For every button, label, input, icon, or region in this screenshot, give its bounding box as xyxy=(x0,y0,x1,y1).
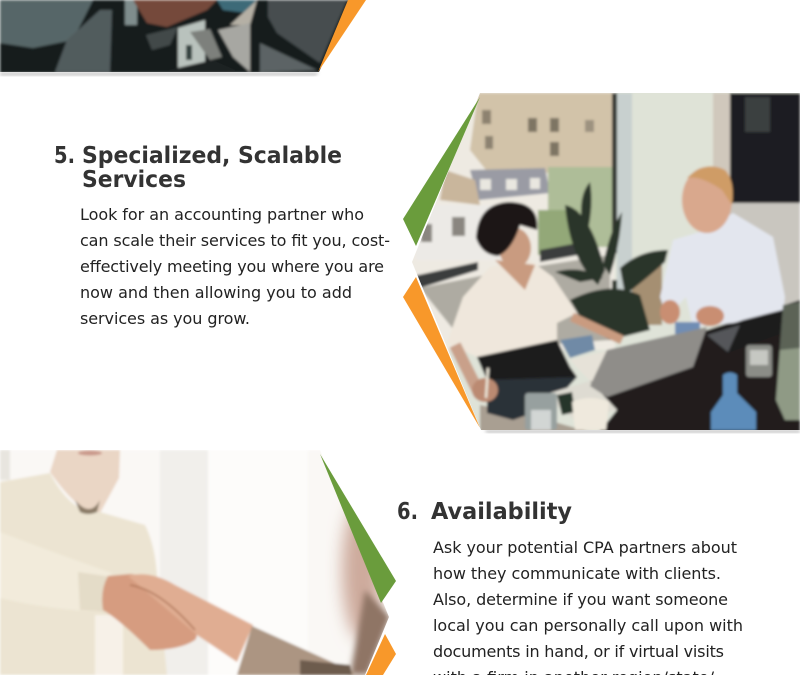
green accent xyxy=(320,454,396,603)
chair, papers and laptop xyxy=(560,335,595,358)
green accent xyxy=(403,97,480,246)
text block: item 6 body: documents in hand, or if virtual visits xyxy=(433,642,724,661)
panel: item 6 text xyxy=(397,499,743,675)
handshake xyxy=(102,574,197,650)
heading: item 5: Services xyxy=(82,167,186,193)
text block: item 6 body: local you can personally call upon with xyxy=(433,616,743,635)
text block: item 5 body: Look for an accounting partner who xyxy=(80,205,364,224)
text block: item 6 body: how they communicate with clients. xyxy=(433,564,721,583)
heading: item 5 xyxy=(54,143,342,193)
heading: item 6: 6. xyxy=(397,499,418,525)
neck shadow and face xyxy=(75,500,100,514)
panel: handshake photo xyxy=(0,450,400,675)
panel: item 5 text xyxy=(54,143,390,328)
panel: office meeting photo xyxy=(400,90,800,435)
text block: item 5 body: can scale their services to fit you, cost- xyxy=(80,231,390,250)
woman xyxy=(447,202,622,420)
text block: item 6 body: Ask your potential CPA partners about xyxy=(433,538,737,557)
man in sweater xyxy=(50,450,120,513)
orange accent xyxy=(318,0,366,72)
second sleeve xyxy=(237,626,354,675)
man xyxy=(660,166,785,334)
orange accent xyxy=(403,277,480,428)
heading: item 6: Availability xyxy=(431,499,572,525)
text block: item 5 body: services as you grow. xyxy=(80,309,250,328)
text block: item 6 body xyxy=(433,538,743,675)
window frame and wall xyxy=(612,93,617,253)
text block: item 5 body xyxy=(80,205,390,328)
orange accent xyxy=(366,634,396,675)
text block: item 5 body: now and then allowing you to add xyxy=(80,283,352,302)
text block: item 6 body: Also, determine if you want someone xyxy=(433,590,728,609)
text block: item 5 body: effectively meeting you where you are xyxy=(80,257,384,276)
plant xyxy=(555,182,668,340)
table xyxy=(590,300,800,435)
window view xyxy=(400,90,615,350)
heading: item 5: Specialized, Scalable xyxy=(82,143,342,169)
heading: item 5: 5. xyxy=(54,143,75,169)
right blurred background figure xyxy=(342,500,382,640)
glass, cup, jug, carafe xyxy=(746,345,772,377)
panel: top photo xyxy=(0,0,366,76)
